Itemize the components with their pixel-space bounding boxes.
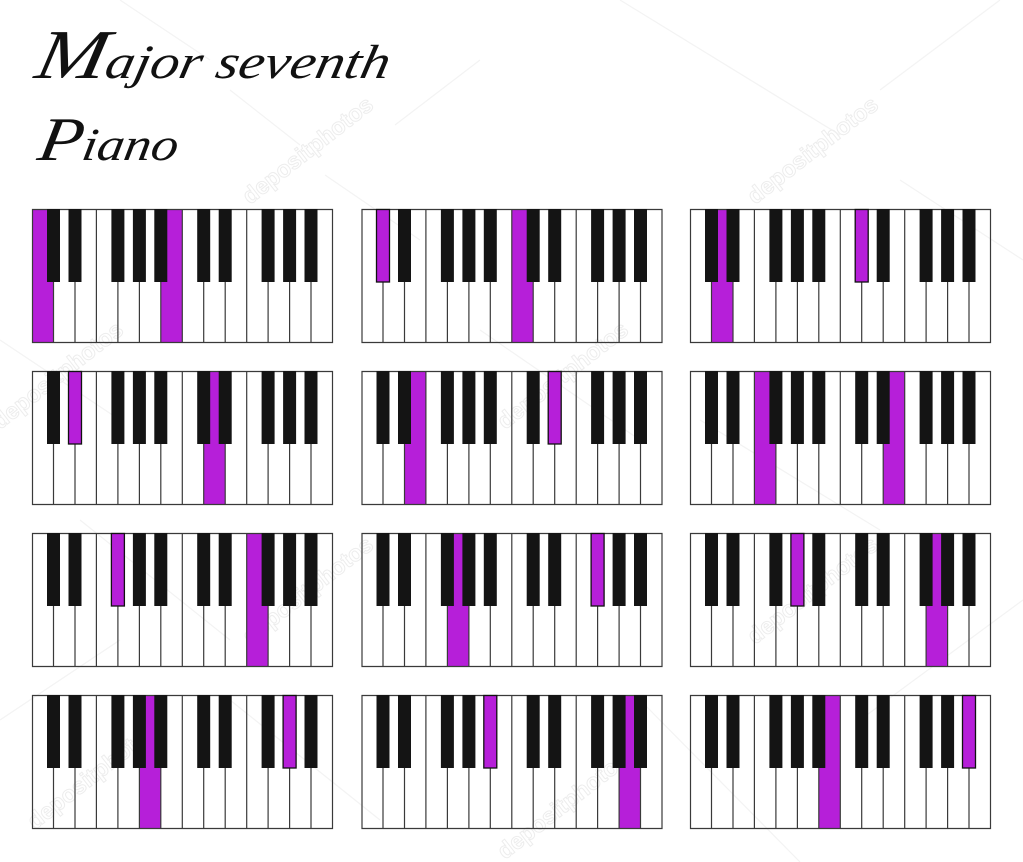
panel: keyboard row 4 column 3 [690,695,990,829]
background watermark: depositphotos [492,746,633,862]
panel: keyboard row 4 column 1 [32,695,332,829]
panel: keyboard row 3 column 1 [32,533,332,667]
panel: keyboard row 1 column 2 [362,209,662,343]
background watermark: depositphotos [237,531,378,649]
background watermark: depositphotos [237,91,378,209]
panel: keyboard row 3 column 2 [362,533,662,667]
panel: keyboard row 4 column 2 [362,695,662,829]
background watermark: depositphotos [742,91,883,209]
background watermark: depositphotos [742,531,883,649]
panel: keyboard row 3 column 3 [690,533,990,667]
panel: keyboard row 1 column 1 [32,209,332,343]
panel: keyboard row 2 column 3 [690,371,990,505]
panel: keyboard row 2 column 2 [362,371,662,505]
background watermark: depositphotos [22,716,163,834]
title: Major seventh [28,17,400,94]
panel: keyboard row 1 column 3 [690,209,990,343]
background watermark: depositphotos [492,316,633,434]
panel: keyboard row 2 column 1 [32,371,332,505]
subtitle: Piano [32,104,186,174]
